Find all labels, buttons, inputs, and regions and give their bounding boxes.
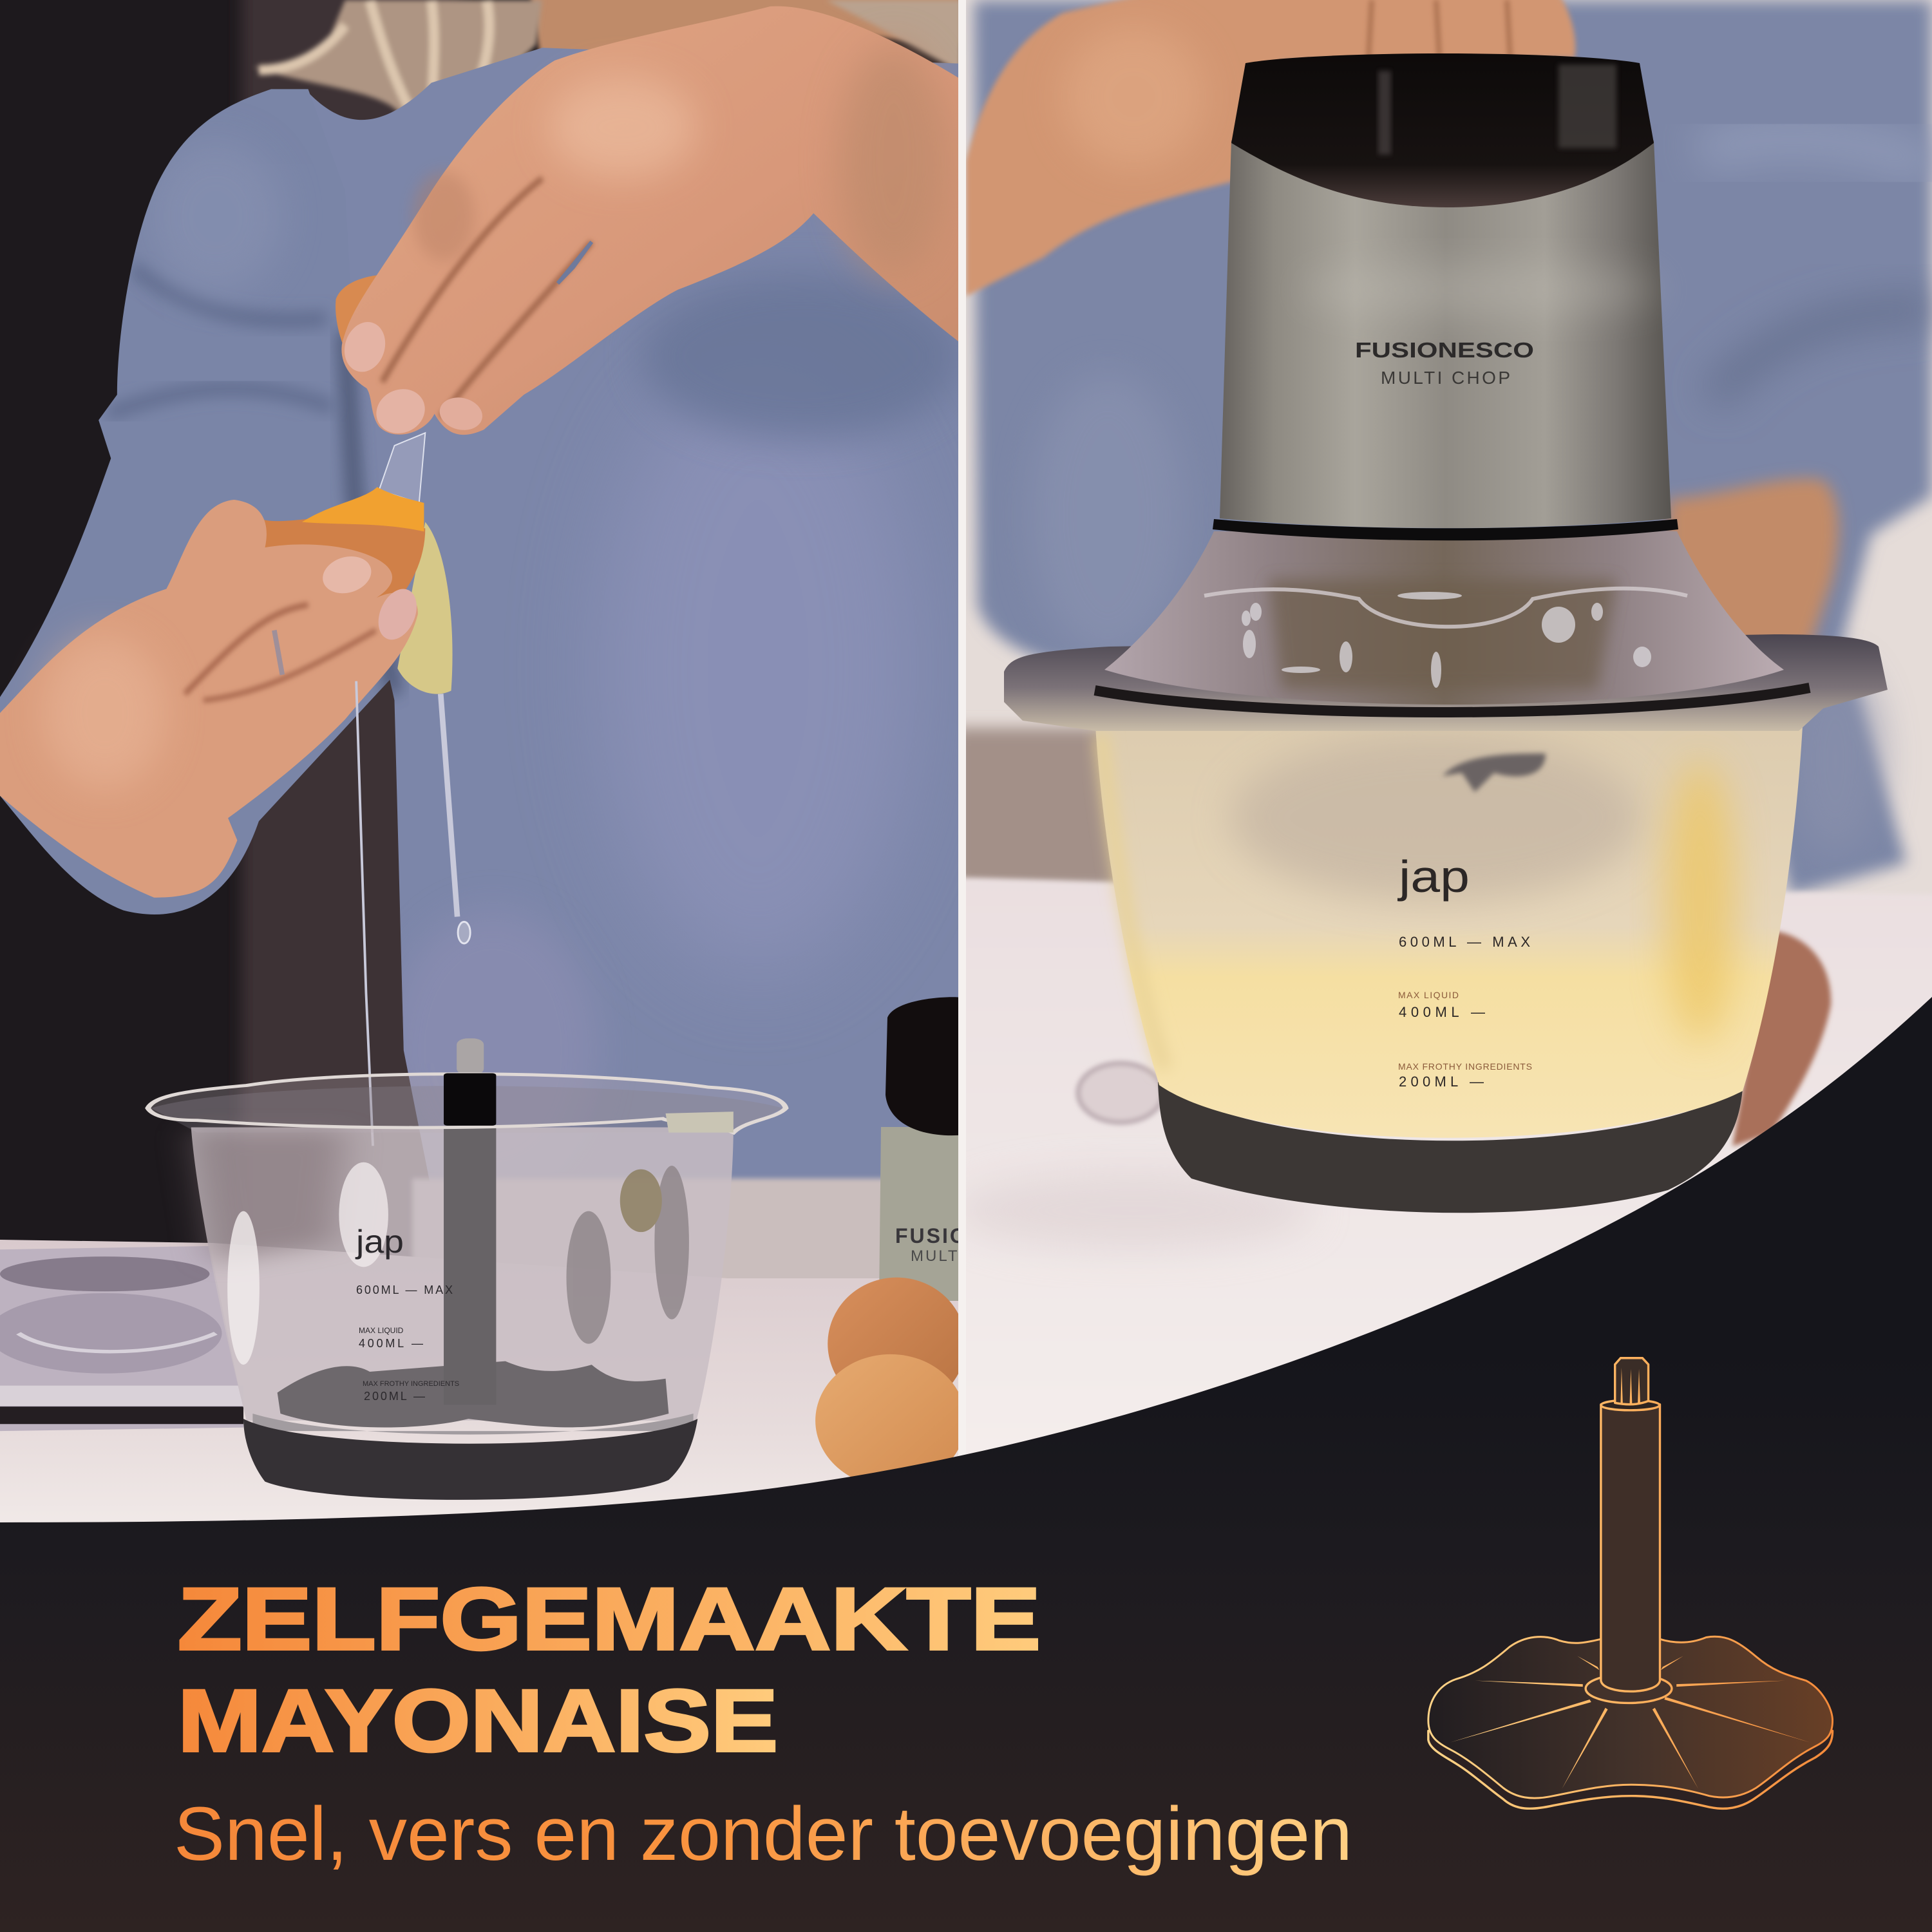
hair on the right: [828, 0, 958, 64]
brand name: FUSIONESCO: [1355, 338, 1534, 362]
icon pin grooves: [1620, 1368, 1640, 1404]
lid reflections: [1378, 64, 1616, 155]
neck: [528, 0, 958, 50]
lid plate: [0, 1246, 243, 1431]
600 ml mark: 600ML — MAX: [356, 1283, 453, 1296]
glass bowl with stem: [148, 1038, 786, 1500]
grey smear: [1230, 734, 1642, 902]
front egg: [815, 1354, 966, 1487]
wavy blade base in the bowl: [278, 1361, 668, 1427]
sweater body: [308, 48, 961, 1190]
darker upper-left glass: [193, 1131, 345, 1264]
shell bottom half: [260, 516, 425, 638]
white divider between photos: [958, 0, 966, 1481]
lid highlights: [19, 1333, 216, 1352]
table top: [947, 877, 1932, 1578]
sweater lighting: [108, 140, 961, 1190]
left jar edge: [1101, 734, 1166, 1069]
gaps between the fingers: [382, 178, 542, 382]
yellow swirl: [1665, 760, 1736, 1043]
icon hub ring: [1586, 1674, 1672, 1703]
hair: [254, 0, 543, 111]
stem black top: [444, 1074, 496, 1126]
icon stem top: [1601, 1400, 1660, 1410]
title line two: MAYONAISE: [178, 1672, 778, 1770]
bowl markings: [355, 1224, 459, 1403]
dark curved footer shape: [0, 997, 1932, 1932]
upper hand: [338, 6, 961, 440]
table top: [0, 1240, 958, 1558]
lid rim flange: [1004, 634, 1888, 731]
hand shape: [0, 500, 418, 898]
brown wall band: [953, 728, 1127, 889]
appliance silver body: [879, 1127, 966, 1301]
pale room background: [966, 0, 1932, 902]
title: [178, 1570, 1041, 1770]
max frothy label: MAX FROTHY INGREDIENTS: [363, 1380, 459, 1388]
bowl rim: [148, 1074, 786, 1133]
lid dome upper shadow: [0, 1256, 209, 1291]
icon stem: [1601, 1405, 1660, 1691]
dome shape: [1104, 531, 1784, 705]
200 ml mark: 200ML —: [364, 1390, 425, 1403]
glass lid lying on the table: [0, 1246, 243, 1431]
finger shadow: [1063, 26, 1204, 167]
dome interior: [1269, 580, 1616, 689]
black seal ring: [1213, 519, 1678, 540]
bowl interior behind the rim: [151, 1086, 782, 1133]
elbow skin: [1668, 478, 1839, 657]
appliance brand: FUSIONESCO: [895, 1224, 1051, 1247]
appliance model: MULTI CHOP: [911, 1247, 1024, 1265]
stem metal pin: [457, 1038, 484, 1075]
appliance black lid: [886, 997, 966, 1135]
icon radial ribs: [1450, 1656, 1810, 1789]
glass reflections: [227, 1162, 689, 1365]
title line one: ZELFGEMAAKTE: [178, 1570, 1041, 1669]
egg shell held in the upper hand: [336, 274, 456, 392]
sweater visible between the fingers: [558, 242, 592, 283]
hand behind the jar: [1732, 931, 1831, 1146]
falling egg white threads: [274, 630, 470, 1146]
subtitle: Snel, vers en zonder toevoegingen: [174, 1792, 1352, 1877]
product name: MULTI CHOP: [1381, 368, 1510, 388]
forearm and palm: [966, 0, 1575, 296]
steel sheen: [1301, 264, 1662, 316]
fingernails: [319, 551, 375, 599]
arm and hand on top of the lid: [966, 0, 1575, 296]
brushed steel body: [1220, 140, 1671, 528]
back egg: [828, 1278, 966, 1410]
glass dome: [1104, 531, 1784, 705]
chopper motor unit: [1004, 53, 1888, 731]
bowl body: [191, 1128, 734, 1421]
sweater folds: [1030, 138, 1932, 857]
knuckle highlights: [549, 77, 696, 178]
panel: photo of the finished mayonnaise in the chopper: [947, 0, 1932, 1578]
400 ml mark: 400ML —: [359, 1337, 423, 1350]
panel: photo of cracking an egg over the bowl: [0, 0, 958, 1522]
dome ridge line: [1204, 589, 1687, 627]
lower bowl ring: [252, 1414, 694, 1435]
water droplets: [1242, 592, 1651, 688]
reflected shadow on the table: [1078, 1063, 1163, 1122]
icon: blade stem with wavy base: [1428, 1358, 1833, 1808]
small appliance standing behind: [879, 997, 1051, 1301]
brown wall behind the person: [242, 0, 460, 1262]
egg white draining from the shell: [397, 522, 453, 694]
icon base top: [1428, 1636, 1833, 1798]
glass jar body: [1095, 715, 1803, 1138]
chopper jar with mayonnaise: [1095, 715, 1803, 1213]
400 ml mark: 400ML —: [1399, 1004, 1485, 1020]
right handle highlight: [666, 1112, 734, 1133]
speckled rim line: [1095, 721, 1800, 730]
lid dark rim: [0, 1406, 243, 1424]
icon drive pin: [1615, 1358, 1649, 1405]
icon base underside: [1428, 1731, 1833, 1808]
fingernails: [338, 316, 392, 378]
sweater sleeve: [0, 89, 394, 914]
hand shape: [341, 6, 961, 435]
clear egg white strand: [379, 433, 425, 503]
pale trousers behind the table: [412, 1179, 902, 1294]
max frothy label: MAX FROTHY INGREDIENTS: [1398, 1061, 1532, 1072]
600 ml mark: 600ML — MAX: [1399, 934, 1530, 950]
bowl silicone base: [243, 1419, 697, 1500]
egg yolk: [302, 487, 424, 531]
eggs: [815, 1278, 966, 1487]
lower hand: [0, 500, 424, 898]
max liquid label: MAX LIQUID: [359, 1326, 404, 1335]
stem: [444, 1126, 496, 1405]
lid dark arc: [1095, 688, 1810, 712]
lid inner dome: [0, 1293, 222, 1374]
finger gaps: [1368, 0, 1510, 58]
bowl logo: jap: [355, 1224, 404, 1260]
stain of blade: [1443, 753, 1546, 792]
jar logo: jap: [1397, 851, 1470, 902]
max liquid label: MAX LIQUID: [1398, 990, 1459, 1000]
hair mass: [254, 0, 543, 111]
table glow below the bowl: [953, 1172, 1314, 1249]
black top lid: [1231, 53, 1654, 207]
200 ml mark: 200ML —: [1399, 1074, 1484, 1090]
dark kitchen backdrop: [0, 0, 232, 1243]
hair strands: [255, 0, 497, 107]
lid pale rim: [0, 1386, 243, 1406]
person: hair, sweater and hands: [0, 0, 961, 1190]
silicone base: [1158, 1082, 1743, 1213]
sweater behind the chopper: [974, 0, 1932, 895]
